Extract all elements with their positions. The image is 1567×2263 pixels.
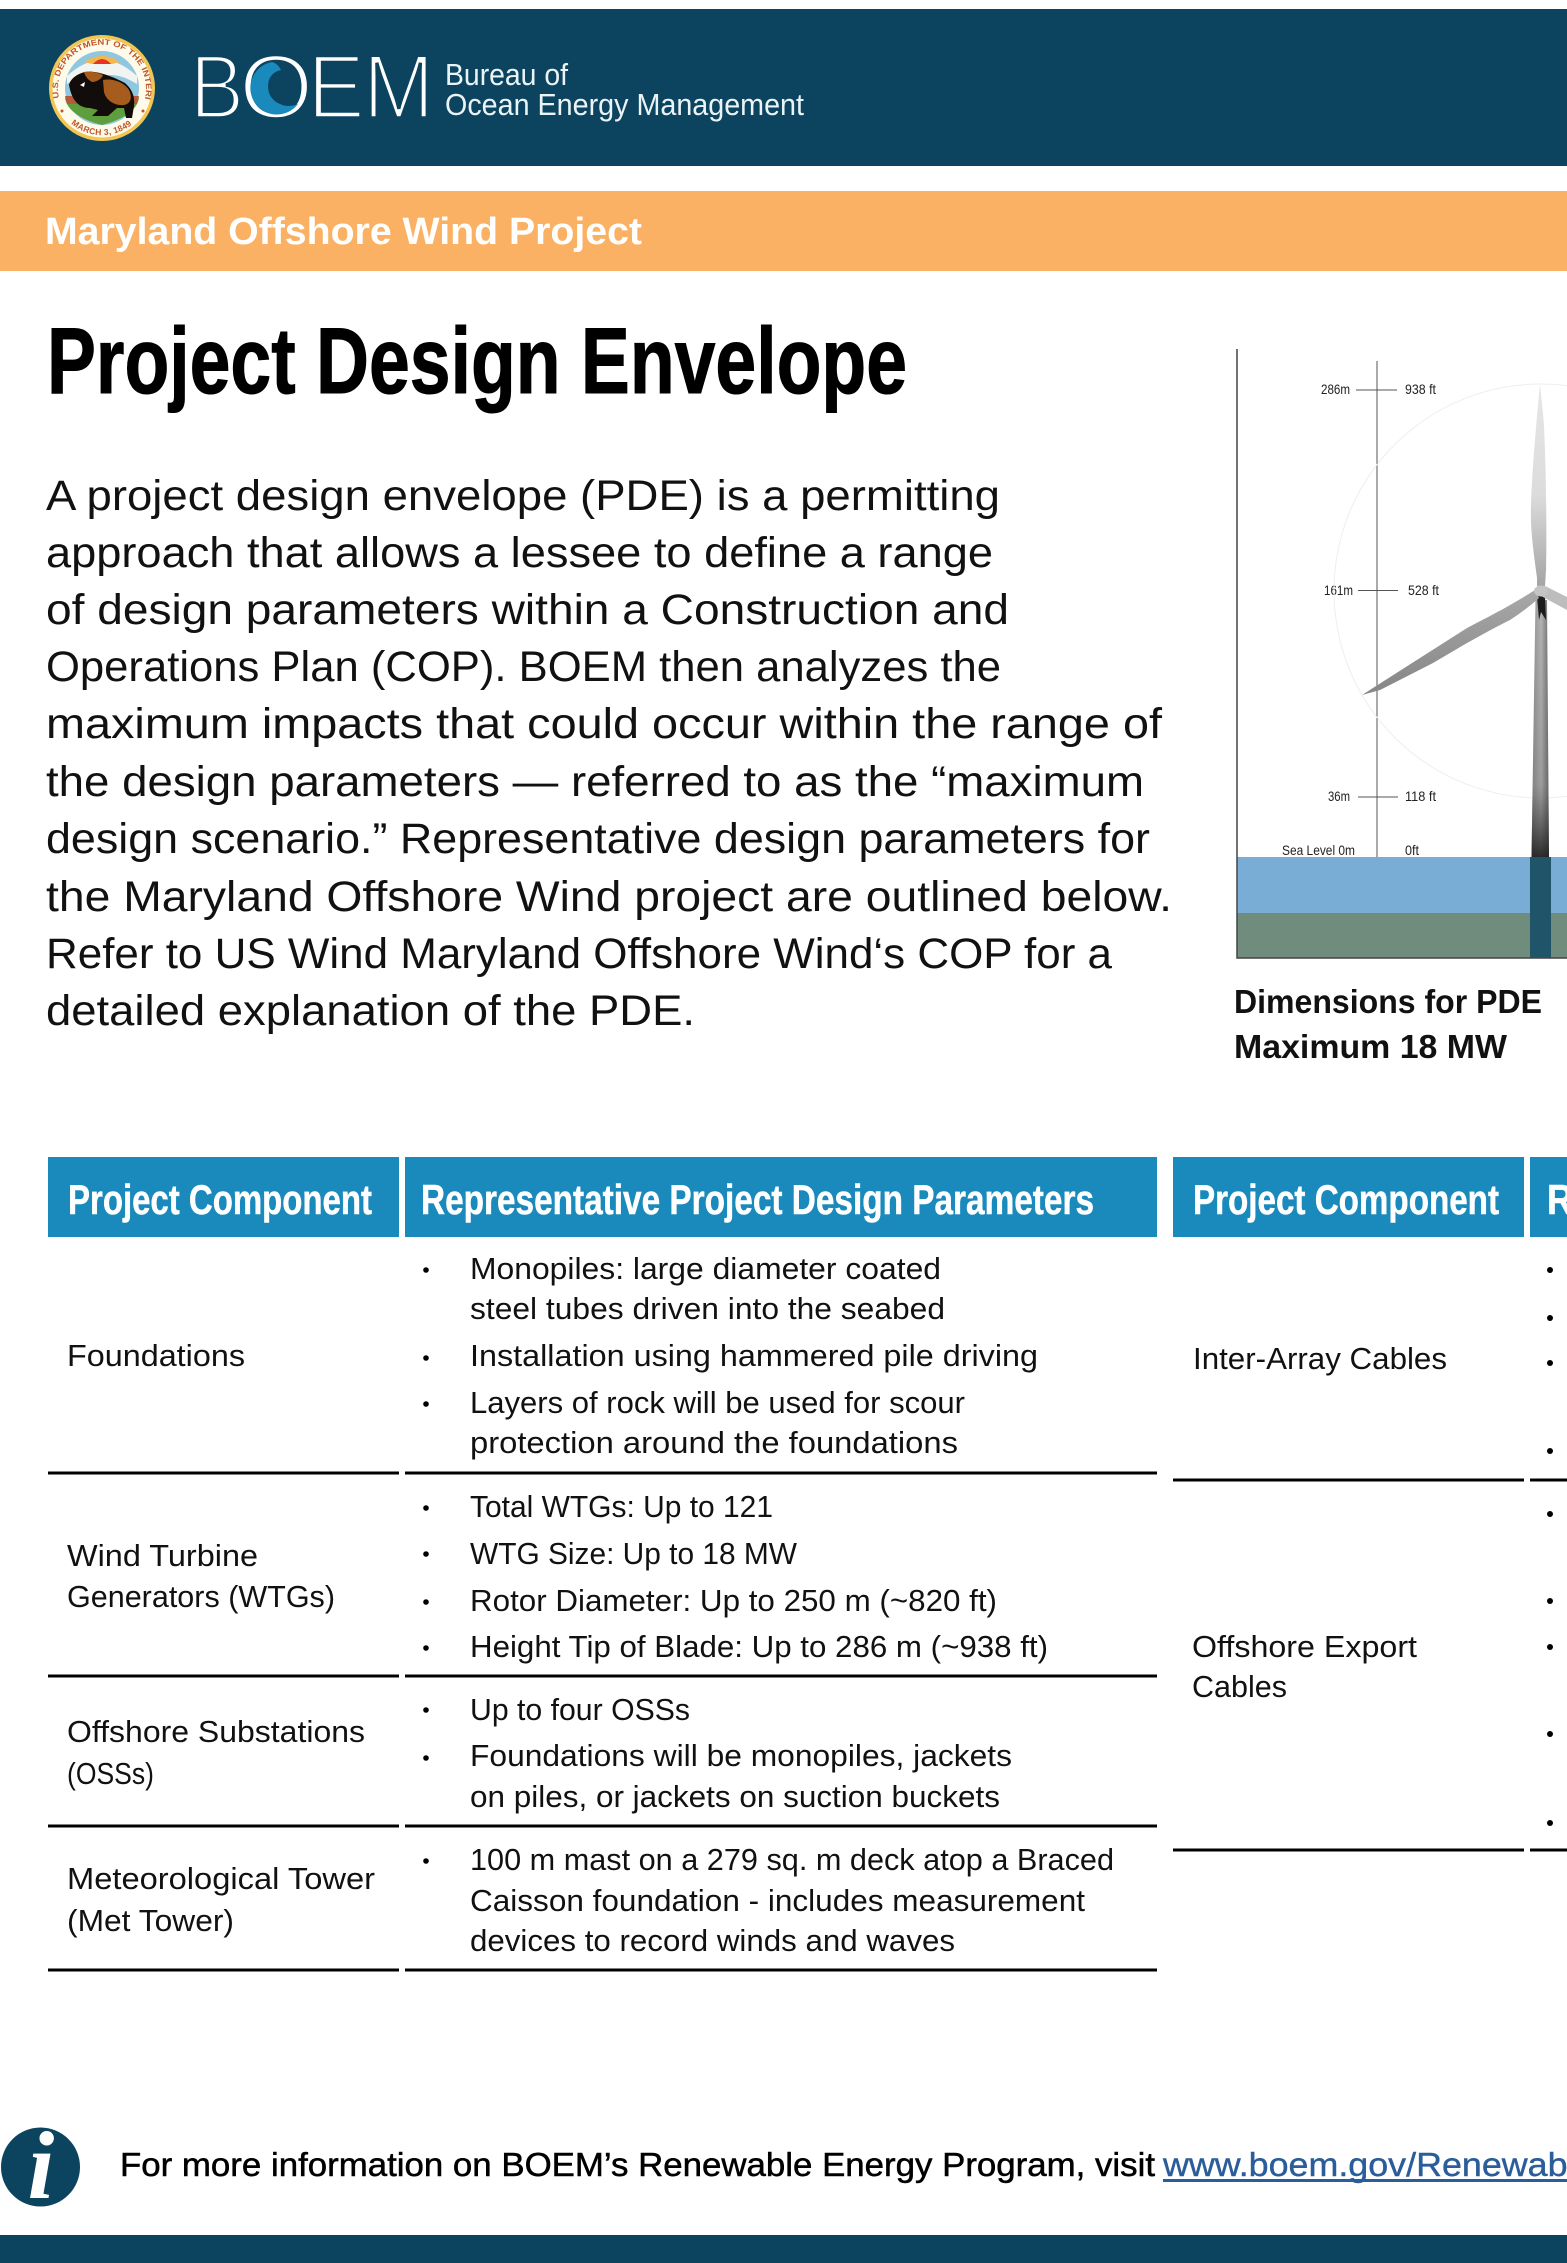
row: wind turbine generators: Height Tip of Blade: Up to 286 m (~938 ft) [470, 1629, 1048, 1664]
water [1237, 857, 1567, 913]
turbine caption: Dimensions for PDE [1234, 983, 1542, 1020]
row: offshore substations: Up to four OSSs [470, 1692, 690, 1727]
row: offshore substations [48, 1692, 1157, 1826]
logo: BOEM wordmark [190, 36, 434, 138]
intro paragraph [46, 472, 1172, 1035]
row: wind turbine generators: WTG Size: Up to 18 MW [470, 1536, 798, 1571]
row: offshore export cables: Cables [1192, 1669, 1287, 1704]
row: foundations: Monopiles: large diameter coated [470, 1251, 941, 1286]
row: offshore substations: (OSSs) [67, 1756, 154, 1791]
height scale axis: 161m [1324, 582, 1353, 598]
table header [48, 1157, 1157, 1237]
height scale axis: 528 ft [1408, 582, 1439, 598]
intro paragraph: approach that allows a lessee to define a range [46, 529, 993, 577]
monopile foundation [1530, 857, 1551, 958]
icon: Department of the Interior seal [49, 35, 155, 141]
icon: bison [69, 72, 134, 118]
title: Project Design Envelope [47, 308, 907, 413]
row: offshore substations: on piles, or jackets on suction buckets [470, 1779, 1000, 1814]
footer note: For more information on BOEM’s Renewable Energy Program, visit [120, 2146, 1155, 2183]
logo: agency name: Ocean Energy Management [445, 87, 804, 122]
row: offshore export cables: Offshore Export [1192, 1629, 1417, 1664]
row: foundations: protection around the foundations [470, 1425, 958, 1460]
row: meteorological tower: (Met Tower) [67, 1903, 234, 1938]
turbine caption [1234, 983, 1542, 1065]
turbine diagram [1237, 349, 1567, 958]
intro paragraph: of design parameters within a Construction and [46, 586, 1009, 634]
row: meteorological tower: Caisson foundation - includes measurement [470, 1883, 1085, 1918]
icon: information: i [28, 2112, 55, 2219]
seabed [1237, 913, 1567, 958]
footer band [0, 2235, 1567, 2263]
intro paragraph: maximum impacts that could occur within the range of [46, 700, 1163, 748]
logo: BOEM wordmark: B [190, 37, 244, 138]
icon: wave in the O [250, 62, 298, 115]
project banner: Maryland Offshore Wind Project [45, 211, 642, 253]
intro paragraph: the Maryland Offshore Wind project are outlined below. [46, 873, 1172, 921]
row: wind turbine generators: Wind Turbine [67, 1538, 258, 1573]
project banner [0, 191, 1567, 271]
row: inter-array cables [1173, 1267, 1567, 1480]
row: foundations: Foundations [67, 1338, 245, 1373]
seal text: MARCH 3, 1849 [71, 119, 131, 136]
footer note [120, 2146, 1567, 2183]
row: meteorological tower: Meteorological Tower [67, 1861, 375, 1896]
height scale axis: 0ft [1405, 842, 1419, 858]
row: meteorological tower [48, 1842, 1157, 1970]
right table header [1173, 1157, 1567, 1237]
logo: BOEM wordmark: M [363, 36, 434, 138]
row: foundations: Installation using hammered pile driving [470, 1338, 1038, 1373]
intro paragraph: detailed explanation of the PDE. [46, 987, 695, 1035]
height scale axis: Sea Level 0m [1282, 842, 1355, 858]
row: inter-array cables: Inter-Array Cables [1193, 1341, 1447, 1376]
intro paragraph: A project design envelope (PDE) is a permitting [46, 472, 1000, 520]
logo: BOEM wordmark: O [239, 36, 313, 138]
seal text [52, 39, 152, 136]
turbine tower [1532, 596, 1549, 857]
row: foundations [48, 1251, 1157, 1473]
height scale axis: 118 ft [1405, 788, 1436, 804]
row: offshore export cables [1173, 1511, 1567, 1850]
header band [0, 9, 1567, 166]
row: wind turbine generators: Rotor Diameter: Up to 250 m (~820 ft) [470, 1583, 997, 1618]
intro paragraph: design scenario.” Representative design parameters for [46, 815, 1150, 863]
intro paragraph: Refer to US Wind Maryland Offshore Wind‘s COP for a [46, 930, 1112, 978]
logo: BOEM wordmark: E [308, 36, 365, 138]
left table [48, 1157, 1157, 1970]
row: foundations: Layers of rock will be used for scour [470, 1385, 965, 1420]
turbine caption: Maximum 18 MW [1234, 1028, 1508, 1065]
icon: information [1, 2112, 80, 2219]
logo: agency name: Bureau of [445, 57, 568, 92]
table header: Representative Project Design Parameters [421, 1176, 1094, 1223]
turbine blades [1362, 384, 1567, 695]
row: offshore substations: Foundations will be monopiles, jackets [470, 1738, 1012, 1773]
right table [1173, 1157, 1567, 1850]
row: wind turbine generators: Generators (WTGs) [67, 1579, 335, 1614]
logo: agency name [445, 57, 804, 122]
height scale axis: 36m [1328, 788, 1350, 804]
intro paragraph: the design parameters — referred to as the “maximum [46, 758, 1144, 806]
rotor sweep circle [1334, 384, 1567, 798]
table header: Project Component [68, 1176, 372, 1223]
seal sky and sun [67, 60, 137, 84]
height scale axis: 938 ft [1405, 381, 1436, 397]
row: offshore substations: Offshore Substations [67, 1714, 365, 1749]
height scale axis: 286m [1321, 381, 1350, 397]
seal ground [65, 98, 139, 125]
intro paragraph: Operations Plan (COP). BOEM then analyzes the [46, 643, 1001, 691]
row: foundations: steel tubes driven into the seabed [470, 1291, 945, 1326]
row: wind turbine generators: Total WTGs: Up to 121 [470, 1489, 773, 1524]
height scale axis [1282, 361, 1439, 858]
row: wind turbine generators [48, 1489, 1157, 1676]
row: meteorological tower: devices to record winds and waves [470, 1923, 955, 1958]
row: meteorological tower: 100 m mast on a 279 sq. m deck atop a Braced [470, 1842, 1114, 1877]
